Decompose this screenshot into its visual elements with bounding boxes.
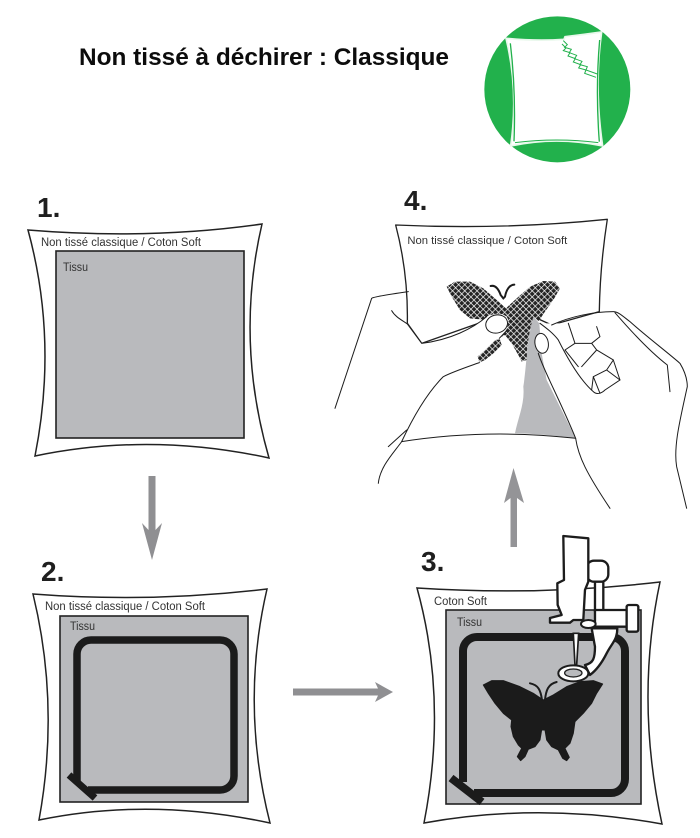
step number 3: 3. [421,546,444,577]
step 3 [417,536,662,824]
fabric label 1: Tissu [63,262,88,274]
stabilizer label 3: Coton Soft [434,596,488,608]
icon: green circle with torn stabilizer sheet [484,16,630,162]
tearing illustration with hands [335,219,687,508]
step number 4: 4. [404,185,427,216]
step 1 [28,192,269,458]
stabilizer sheet 4 [396,219,607,343]
meshed butterfly [447,281,560,362]
stabilizer sheet 3 [417,582,662,824]
step number 1: 1. [37,192,60,223]
stabilizer sheet 1 [28,224,269,458]
right hand [533,312,687,508]
left hand [335,292,510,483]
fabric square 1 [56,251,244,438]
icon: solid butterfly [483,681,603,761]
fabric label 3: Tissu [457,617,482,629]
arrow: step 1 to 2 [142,476,162,560]
step number 2: 2. [41,556,64,587]
stabilizer label 4: Non tissé classique / Coton Soft [407,235,568,247]
fabric square 2 [60,616,248,802]
step 4 [335,185,687,508]
arrow: step 2 to 3 [293,682,393,702]
fabric label 2: Tissu [70,621,95,633]
stabilizer label 1: Non tissé classique / Coton Soft [41,237,202,249]
bottom edge of stabilizer [402,434,576,442]
fabric square 3 [446,610,641,804]
hoop basting frame 2 [69,640,234,798]
stabilizer label 2: Non tissé classique / Coton Soft [45,601,206,613]
torn fabric [515,317,576,438]
title: Non tissé à déchirer : Classique [79,44,449,71]
stabilizer sheet 2 [33,589,270,823]
arrow: step 3 to 4 [504,468,524,547]
hoop basting frame 3 [451,637,625,802]
icon: sewing machine presser foot and needle [550,536,638,681]
step 2 [33,556,270,823]
